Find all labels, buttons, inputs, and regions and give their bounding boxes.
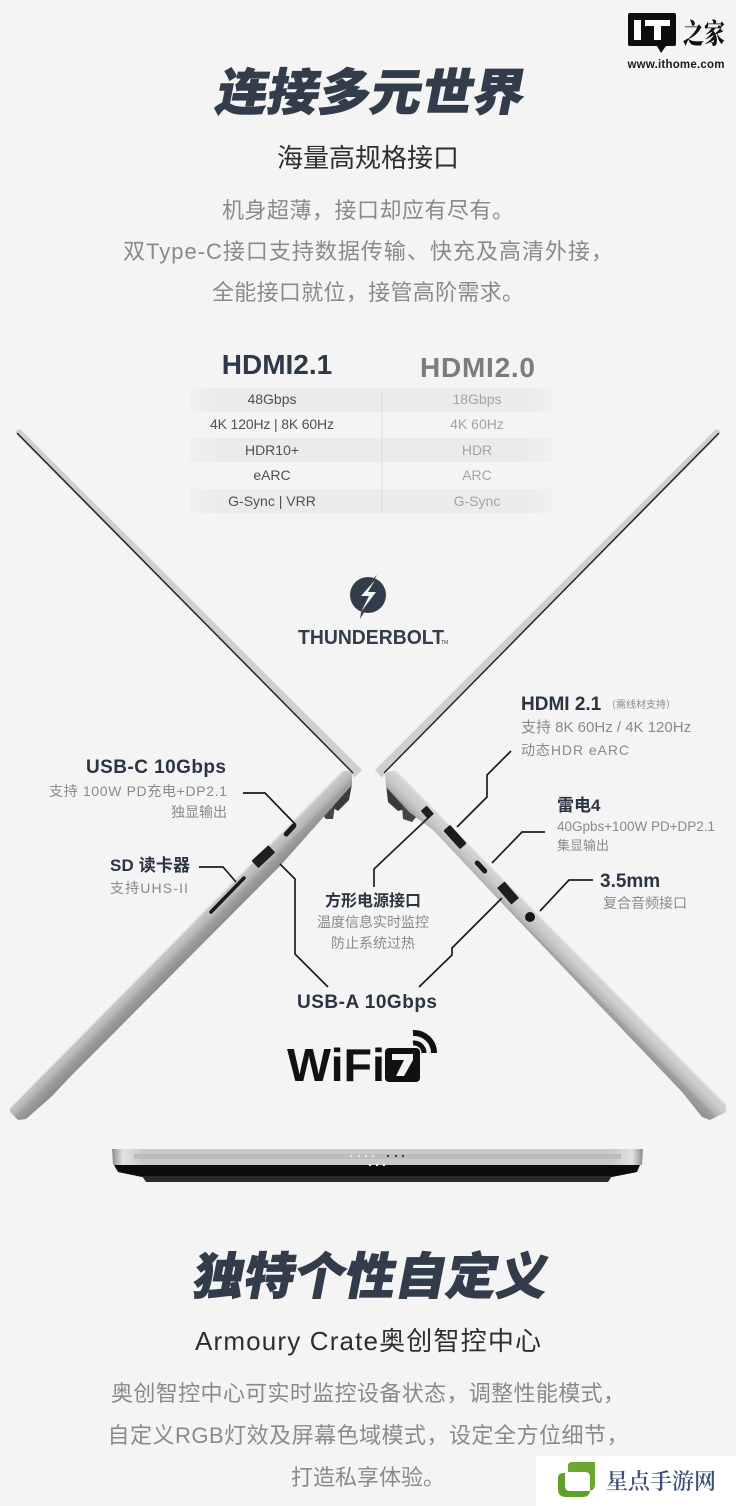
callout: USB-C 10Gbps: USB-C 10Gbps bbox=[86, 757, 226, 778]
callout: square power port bbox=[317, 891, 429, 951]
column values: HDMI2.1: G-Sync | VRR bbox=[228, 493, 316, 509]
column values: HDMI2.1: HDR10+ bbox=[245, 442, 299, 458]
column values: HDMI2.0 bbox=[450, 391, 504, 509]
callout: SD card reader: 支持UHS-II bbox=[110, 880, 188, 896]
column values: HDMI2.1 bbox=[210, 391, 334, 509]
laptop: left, side view bbox=[10, 429, 362, 1120]
title: 连接多元世界: 连接多元世界 bbox=[212, 64, 531, 121]
text block: Armoury Crate description: 奥创智控中心可实时监控设备状态，调整性能模式， bbox=[111, 1381, 625, 1406]
port: USB-A bbox=[497, 881, 519, 905]
callout: Thunderbolt 4 bbox=[557, 796, 715, 853]
callout: Thunderbolt 4: 雷电4 bbox=[557, 796, 601, 815]
callout: HDMI 2.1: 支持 8K 60Hz / 4K 120Hz bbox=[521, 719, 691, 736]
column values: HDMI2.0: ARC bbox=[462, 467, 492, 483]
text block: intro bbox=[123, 198, 613, 305]
port: audio jack bbox=[525, 912, 535, 922]
callout: HDMI 2.1: （需线材支持） bbox=[606, 698, 676, 711]
callout: USB-C 10Gbps bbox=[49, 757, 227, 820]
logo: ithome: 之家 bbox=[683, 12, 725, 51]
icon: thunderbolt logo: THUNDERBOLT bbox=[298, 627, 444, 649]
port: HDMI bbox=[443, 825, 467, 849]
column values: HDMI2.0: 4K 60Hz bbox=[450, 416, 504, 432]
callout: square power port: 温度信息实时监控 bbox=[317, 914, 429, 930]
callout: SD card reader: SD 读卡器 bbox=[110, 856, 190, 875]
hinge and feet bbox=[386, 784, 410, 811]
text block: intro: 机身超薄，接口却应有尽有。 bbox=[222, 198, 514, 223]
logo: ithome bbox=[626, 12, 725, 71]
laptop: right, side view bbox=[375, 429, 726, 1120]
callout: HDMI 2.1: 动态HDR eARC bbox=[521, 742, 629, 758]
port: SD card slot bbox=[211, 878, 244, 912]
text block: Armoury Crate description bbox=[108, 1381, 628, 1490]
rubber foot bbox=[49, 1079, 68, 1096]
port: USB-C thunderbolt bbox=[474, 859, 488, 875]
text block: intro: 双Type-C接口支持数据传输、快充及高清外接， bbox=[123, 239, 613, 264]
callout: square power port: 方形电源接口 bbox=[325, 891, 421, 910]
callout: square power port: 防止系统过热 bbox=[331, 935, 415, 951]
text block: Armoury Crate description: 打造私享体验。 bbox=[291, 1465, 445, 1490]
column values: HDMI2.1: eARC bbox=[253, 467, 291, 483]
subtitle: Armoury Crate: Armoury Crate奥创智控中心 bbox=[195, 1326, 541, 1356]
comparison table: HDMI2.1 vs HDMI2.0 bbox=[190, 349, 553, 514]
laptop screen bbox=[16, 429, 362, 778]
icon: green logo bbox=[558, 1462, 595, 1497]
laptop base bbox=[385, 771, 726, 1120]
callout: USB-C 10Gbps: 独显输出 bbox=[171, 804, 227, 820]
hinge and feet bbox=[330, 784, 352, 811]
column values: HDMI2.0: G-Sync bbox=[454, 493, 500, 509]
watermark: 星点手游网 bbox=[536, 1456, 736, 1506]
callout: 3.5mm: 3.5mm bbox=[600, 871, 660, 892]
icon: thunderbolt logo: TM bbox=[441, 640, 448, 646]
leader lines bbox=[199, 751, 593, 987]
title: 独特个性自定义: 独特个性自定义 bbox=[189, 1248, 554, 1305]
column heading: HDMI2.1: HDMI2.1 bbox=[222, 349, 332, 380]
callout: 3.5mm bbox=[600, 871, 687, 911]
column values: HDMI2.1: 48Gbps bbox=[247, 391, 297, 407]
icon: WiFi 7 logo bbox=[287, 1033, 434, 1091]
icon: thunderbolt logo bbox=[298, 575, 448, 649]
text block: intro: 全能接口就位，接管高阶需求。 bbox=[212, 280, 524, 305]
column values: HDMI2.0: 18Gbps bbox=[452, 391, 502, 407]
callout: Thunderbolt 4: 40Gpbs+100W PD+DP2.1 bbox=[557, 819, 715, 834]
callout: 3.5mm: 复合音频接口 bbox=[603, 895, 687, 911]
logo: ithome: www.ithome.com bbox=[626, 59, 724, 71]
icon: WiFi 7 logo: WiFi bbox=[287, 1039, 385, 1091]
port: power bbox=[421, 806, 434, 819]
text block: Armoury Crate description: 自定义RGB灯效及屏幕色域模式，设定全方位细节， bbox=[108, 1423, 628, 1448]
callout: HDMI 2.1 bbox=[521, 694, 691, 758]
column values: HDMI2.1: 4K 120Hz | 8K 60Hz bbox=[210, 416, 334, 432]
port: USB-C bbox=[283, 822, 297, 838]
laptop screen bbox=[375, 429, 720, 778]
callout: SD card reader bbox=[110, 856, 190, 896]
laptop base bbox=[10, 771, 352, 1120]
subtitle: 海量高规格接口: 海量高规格接口 bbox=[277, 143, 459, 173]
callout: Thunderbolt 4: 集显输出 bbox=[557, 838, 609, 853]
watermark: 星点手游网: 星点手游网 bbox=[606, 1465, 716, 1496]
callout: HDMI 2.1: HDMI 2.1 bbox=[521, 694, 602, 715]
callout: USB-C 10Gbps: 支持 100W PD充电+DP2.1 bbox=[49, 783, 227, 799]
column values: HDMI2.0: HDR bbox=[462, 442, 492, 458]
callout: USB-A 10Gbps: USB-A 10Gbps bbox=[297, 992, 437, 1013]
laptop: front view bbox=[112, 1149, 643, 1182]
port: USB-A bbox=[252, 845, 275, 868]
column heading: HDMI2.0: HDMI2.0 bbox=[420, 352, 535, 383]
